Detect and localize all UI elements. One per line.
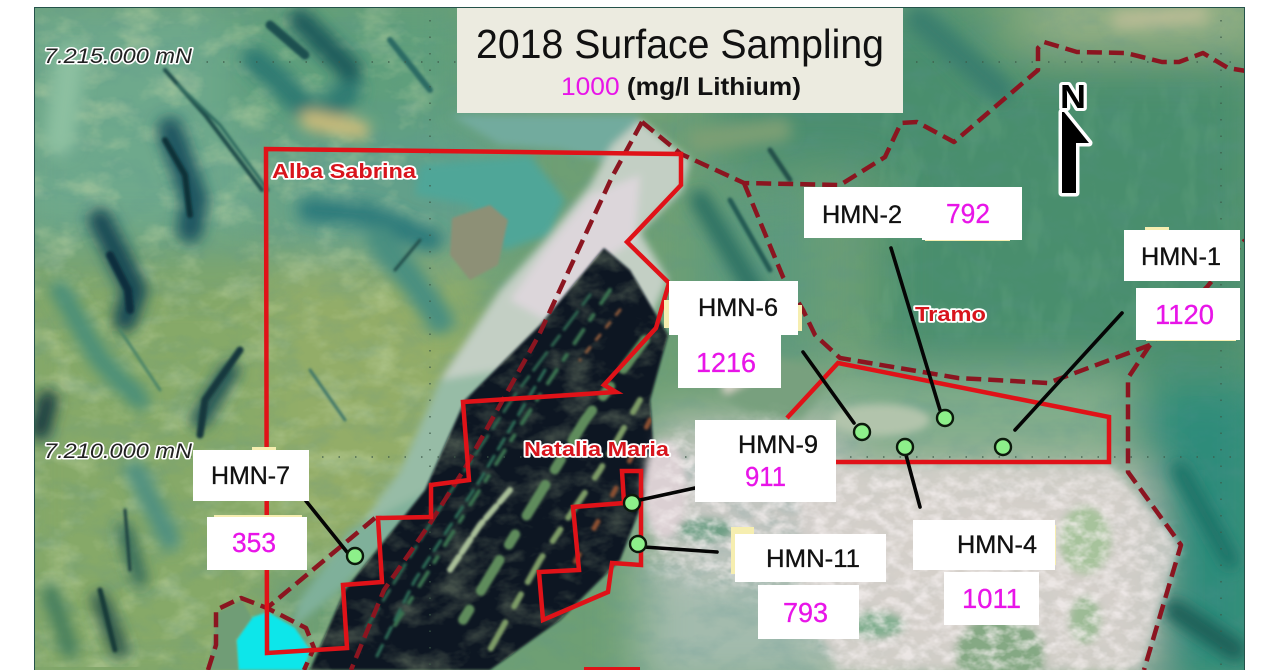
label: HMN-2 792: 792 (946, 198, 990, 229)
icon: north arrow (1060, 78, 1089, 193)
sample points (347, 410, 1011, 564)
label: HMN-4 (913, 520, 1055, 570)
label: HMN-2 792: HMN-2 (822, 201, 902, 229)
value: HMN-7 353: 353 (232, 527, 276, 558)
red concession: bottom edge (584, 667, 640, 670)
red concession: Alba Sabrina (266, 149, 681, 653)
dashed tenement boundaries (208, 42, 1246, 670)
label: HMN-4: HMN-4 (957, 531, 1037, 559)
label: HMN-6: HMN-6 (698, 294, 778, 322)
label: HMN-6 (669, 281, 798, 335)
label: HMN-9 911: HMN-9 (738, 431, 818, 459)
icon: north arrow: N (1060, 78, 1086, 115)
value: HMN-11 793 (758, 585, 859, 639)
label: HMN-11 (735, 534, 886, 582)
concession name: Natalia Maria: Natalia Maria (524, 438, 670, 461)
lower-right salt flat texture (643, 350, 1180, 670)
cyan lake (236, 612, 310, 670)
fine terrain texture (35, 8, 437, 667)
salt crust speckle (640, 400, 1190, 670)
value: HMN-1 1120: 1120 (1155, 299, 1214, 330)
value: HMN-11 793: 793 (783, 597, 828, 628)
title heading: 2018 Surface Sampling (476, 21, 884, 67)
label: HMN-7 (193, 450, 309, 501)
value: HMN-7 353 (207, 517, 307, 570)
red concession: Natalia Maria (539, 471, 641, 620)
teal pond (415, 155, 565, 250)
label: HMN-1: HMN-1 (1141, 243, 1221, 271)
lake shore green (208, 600, 252, 670)
coordinate label 7.215.000 mN: 7.215.000 mN (44, 45, 193, 68)
yellow fragments behind labels (214, 227, 1236, 574)
rocky outcrop (450, 205, 508, 280)
coordinate label 7.210.000 mN: 7.210.000 mN (44, 440, 193, 463)
label: HMN-11: HMN-11 (766, 545, 860, 573)
legend: value unit: 1000 (mg/l Lithium) (561, 73, 801, 101)
label: HMN-9 911: 911 (745, 461, 786, 492)
value: HMN-4 1011: 1011 (962, 583, 1021, 614)
label: HMN-7: HMN-7 (211, 462, 290, 490)
concession name: Tramo: Tramo (915, 303, 986, 326)
white salt flats upper (290, 115, 690, 630)
dark volcanic band (300, 240, 680, 670)
label: HMN-9 911 (695, 420, 836, 502)
red concession: Tramo block (787, 363, 1109, 462)
concession name: Alba Sabrina: Alba Sabrina (272, 160, 417, 183)
leader lines (306, 248, 1122, 552)
value: HMN-4 1011 (944, 572, 1039, 625)
label: HMN-1 (1124, 230, 1240, 281)
label: HMN-2 792 (804, 187, 1022, 240)
value: HMN-6 1216 (678, 335, 781, 388)
title panel (457, 8, 903, 113)
value: HMN-6 1216: 1216 (696, 347, 756, 378)
value: HMN-1 1120 (1136, 288, 1240, 340)
